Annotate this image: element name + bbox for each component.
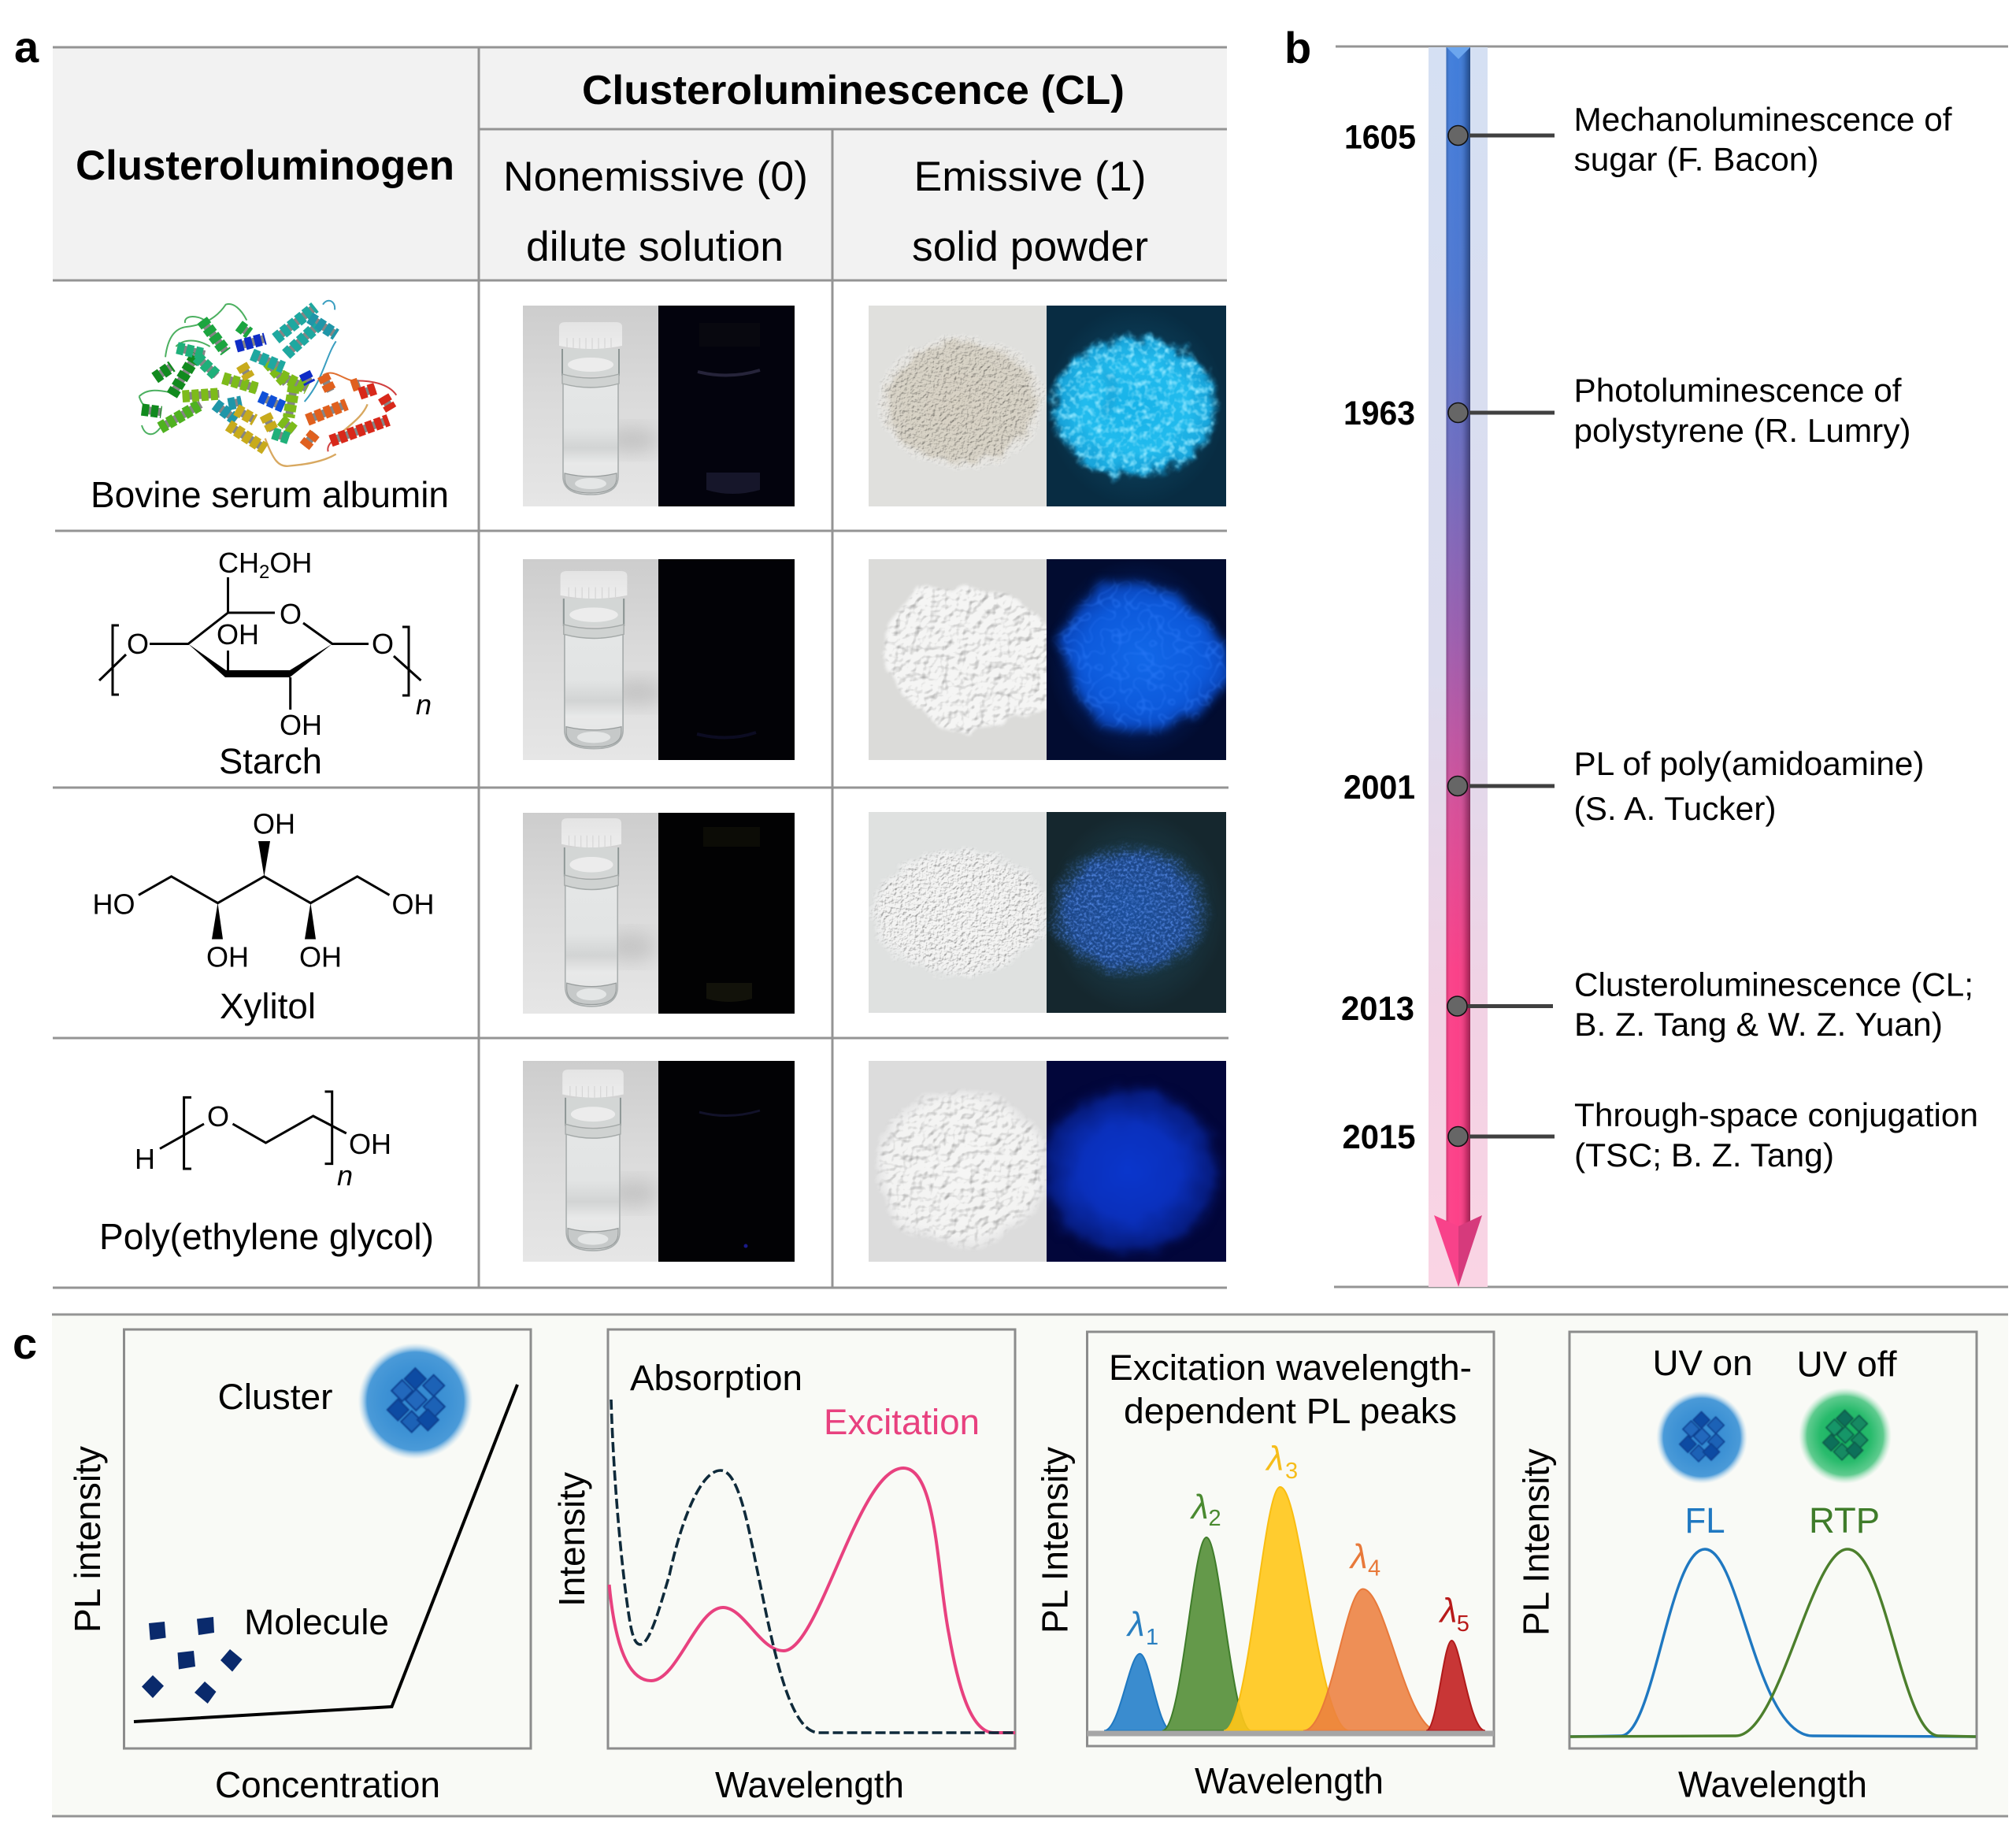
chart: absorption and excitation spectra: Excitation <box>824 1402 980 1442</box>
labels lambda 1-5: λ <box>1439 1592 1457 1630</box>
chemical structure: xylitol: OH <box>299 941 342 973</box>
panel b: timeline <box>1284 23 2008 1287</box>
panel label a: a <box>14 22 39 72</box>
panel label c: c <box>13 1318 37 1368</box>
timeline arrow <box>1434 47 1482 1287</box>
event 2015 <box>1342 1096 1978 1174</box>
chart: PL intensity vs concentration <box>67 1329 531 1805</box>
column heading: emissive <box>912 154 1148 270</box>
event 2015: Through-space conjugation <box>1574 1096 1978 1133</box>
chart: UV on / UV off FL and RTP: Wavelength <box>1678 1764 1867 1805</box>
photo: BSA powder under daylight <box>869 306 1047 506</box>
chart: excitation wavelength-dependent PL peaks <box>1035 1332 1494 1801</box>
labels lambda 1-5: λ <box>1265 1440 1284 1478</box>
chemical structure: xylitol: OH <box>206 941 249 973</box>
chart: excitation wavelength-dependent PL peaks: PL Intensity <box>1035 1447 1076 1633</box>
chart: absorption and excitation spectra <box>551 1329 1015 1805</box>
line: intensity curve <box>134 1385 517 1722</box>
chemical structure: xylitol: HO <box>93 888 135 921</box>
event 2015: 2015 <box>1342 1118 1416 1156</box>
chemical structure: starch: O <box>372 628 394 660</box>
chart: excitation wavelength-dependent PL peaks: Excitation wavelength- <box>1109 1348 1472 1388</box>
photo: xylitol vial under daylight <box>523 813 658 1014</box>
photo: PEG vial under daylight <box>523 1061 660 1262</box>
event 2001: PL of poly(amidoamine) <box>1573 745 1925 782</box>
column heading: emissive: solid powder <box>912 224 1148 270</box>
chart: UV on / UV off FL and RTP <box>1515 1332 1977 1805</box>
photo: xylitol powder under daylight <box>869 812 1049 1013</box>
event 1605: 1605 <box>1344 118 1416 156</box>
photo: PEG powder under daylight <box>869 1061 1050 1262</box>
chemical structure: poly(ethylene glycol): O <box>207 1100 229 1133</box>
chemical structure: xylitol: OH <box>253 808 295 840</box>
panel a: clusteroluminogen table <box>14 22 1230 1288</box>
photo: BSA vial under daylight <box>523 306 660 506</box>
photo: xylitol powder under UV <box>1046 812 1226 1013</box>
chart: PL intensity vs concentration: Concentration <box>215 1764 440 1805</box>
photo: starch powder under daylight <box>869 559 1055 760</box>
photo: starch vial under daylight <box>523 559 667 760</box>
icon: green emitting cluster <box>1799 1388 1892 1484</box>
column heading: nonemissive: Nonemissive (0) <box>503 154 808 200</box>
photo: PEG powder under UV <box>1047 1061 1226 1262</box>
peak lambda 4 <box>1303 1589 1438 1731</box>
chemical structure: starch: 2 <box>259 562 269 583</box>
labels lambda 1-5: 1 <box>1146 1625 1158 1650</box>
table header background <box>53 47 1227 280</box>
labels lambda 1-5: 4 <box>1368 1556 1380 1581</box>
column heading: emissive: Emissive (1) <box>914 154 1147 200</box>
chart: UV on / UV off FL and RTP: UV off <box>1797 1344 1897 1385</box>
icon: dispersed molecules <box>142 1617 243 1704</box>
chemical structure: starch: O <box>280 598 302 630</box>
chemical structure: starch: n <box>416 688 432 721</box>
photo: BSA vial under UV <box>658 306 795 506</box>
chemical structure: starch: OH <box>217 618 259 651</box>
photo: BSA powder under UV <box>1047 306 1226 506</box>
event 2013: 2013 <box>1341 990 1414 1028</box>
protein structure: bovine serum albumin <box>139 301 396 466</box>
chart: UV on / UV off FL and RTP: RTP <box>1809 1500 1880 1541</box>
event 1963: polystyrene (R. Lumry) <box>1573 412 1910 449</box>
peak lambda 5 <box>1426 1641 1485 1731</box>
labels lambda 1-5: 3 <box>1285 1459 1298 1484</box>
chart: excitation wavelength-dependent PL peaks: dependent PL peaks <box>1124 1391 1457 1431</box>
baseline <box>1087 1731 1494 1736</box>
peak lambda 2 <box>1162 1537 1251 1731</box>
chart: UV on / UV off FL and RTP: UV on <box>1652 1343 1753 1383</box>
chemical structure: xylitol: OH <box>392 888 435 921</box>
event 1963: 1963 <box>1343 395 1415 432</box>
label: Starch: Starch <box>219 741 322 781</box>
event 1963 <box>1343 372 1910 449</box>
label: Xylitol: Xylitol <box>220 986 316 1026</box>
labels lambda 1-5 <box>1126 1440 1469 1650</box>
chart: PL intensity vs concentration: Molecule <box>244 1602 389 1642</box>
chart: UV on / UV off FL and RTP: FL <box>1685 1500 1725 1541</box>
event 2001: 2001 <box>1343 769 1415 806</box>
label: Poly(ethylene glycol): Poly(ethylene glycol) <box>99 1216 434 1257</box>
icon: emissive cluster <box>358 1343 472 1459</box>
panel c: characteristics charts <box>13 1314 2008 1816</box>
event 2013: Clusteroluminescence (CL; <box>1574 966 1973 1003</box>
event 2013 <box>1341 966 1973 1043</box>
curve: RTP <box>1570 1549 1976 1737</box>
labels lambda 1-5: 2 <box>1208 1506 1221 1531</box>
photo: PEG vial under UV <box>658 1061 795 1262</box>
chart: absorption and excitation spectra: Intensity <box>551 1472 592 1607</box>
chart: absorption and excitation spectra: Wavelength <box>715 1764 904 1805</box>
chart: UV on / UV off FL and RTP: PL Intensity <box>1515 1448 1556 1636</box>
chemical structure: starch: OH <box>280 709 322 741</box>
event 2013: B. Z. Tang & W. Z. Yuan) <box>1574 1006 1943 1043</box>
labels lambda 1-5: λ <box>1349 1537 1368 1576</box>
chart: PL intensity vs concentration: Cluster <box>217 1377 333 1417</box>
chemical structure: poly(ethylene glycol): OH <box>349 1128 391 1160</box>
heading: Clusteroluminogen: Clusteroluminogen <box>76 143 454 189</box>
chemical structure: starch <box>99 547 432 741</box>
chemical structure: starch: CH <box>218 547 259 579</box>
icon: blue emitting cluster <box>1656 1391 1747 1484</box>
chart: absorption and excitation spectra: Absorption <box>630 1358 802 1398</box>
photo: starch powder under UV <box>1047 559 1230 760</box>
peak lambda 1 <box>1104 1654 1172 1731</box>
chemical structure: poly(ethylene glycol) <box>135 1092 391 1192</box>
photo: xylitol vial under UV <box>658 813 795 1014</box>
event 2001 <box>1343 745 1925 827</box>
panel label b: b <box>1284 23 1311 72</box>
curve: FL <box>1570 1549 1976 1737</box>
curve: excitation <box>610 1468 1015 1733</box>
timeline background band <box>1429 47 1488 1287</box>
curve: absorption <box>611 1400 1015 1733</box>
chemical structure: starch: O <box>127 628 149 660</box>
event 1605: sugar (F. Bacon) <box>1573 140 1819 178</box>
chemical structure: starch: OH <box>269 547 312 579</box>
chemical structure: xylitol <box>93 808 435 973</box>
column heading: nonemissive <box>503 154 808 270</box>
label: Bovine serum albumin: Bovine serum albumin <box>91 474 449 515</box>
peak lambda 3 <box>1224 1487 1350 1731</box>
labels lambda 1-5: 5 <box>1457 1611 1469 1637</box>
event 2001: (S. A. Tucker) <box>1573 790 1777 827</box>
chart: excitation wavelength-dependent PL peaks: Wavelength <box>1195 1760 1384 1801</box>
column heading: nonemissive: dilute solution <box>526 224 784 270</box>
event 1963: Photoluminescence of <box>1573 372 1902 409</box>
photo: starch vial under UV <box>658 559 795 760</box>
chart: PL intensity vs concentration: PL intensity <box>67 1446 108 1633</box>
event 1605: Mechanoluminescence of <box>1573 101 1952 138</box>
panel c background <box>52 1314 2008 1816</box>
event 1605 <box>1344 101 1952 178</box>
labels lambda 1-5: λ <box>1126 1605 1145 1644</box>
heading: Clusteroluminescence (CL): Clusteroluminescence (CL) <box>582 68 1125 113</box>
chemical structure: poly(ethylene glycol): n <box>337 1159 353 1192</box>
chemical structure: poly(ethylene glycol): H <box>135 1143 155 1175</box>
event 2015: (TSC; B. Z. Tang) <box>1574 1136 1834 1174</box>
labels lambda 1-5: λ <box>1190 1488 1209 1526</box>
